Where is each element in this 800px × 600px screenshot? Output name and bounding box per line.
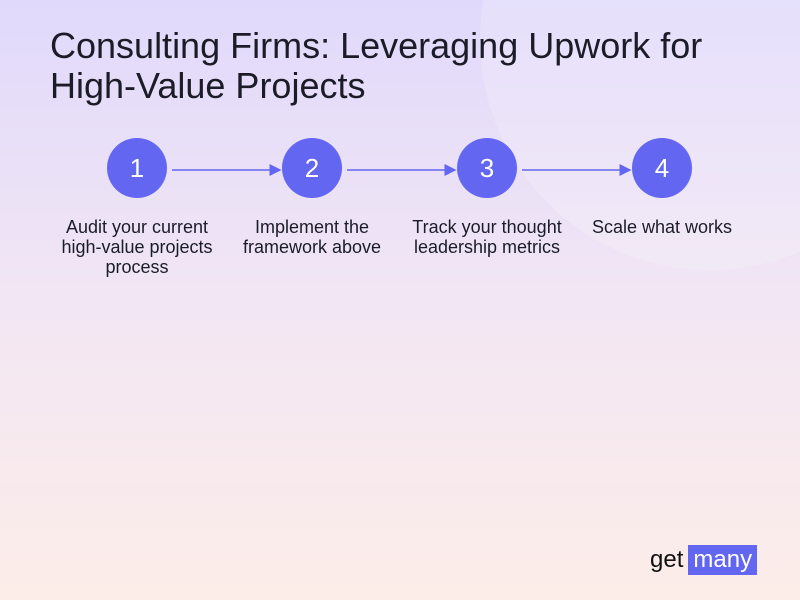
step 1 text: Audit your current high-value projects process (61, 217, 213, 277)
step 2 circle: 2 (305, 153, 319, 183)
step 3 circle (457, 138, 517, 198)
step 3 circle: 3 (480, 153, 494, 183)
step 4 text: Scale what works (592, 217, 732, 237)
step 1 circle: 1 (130, 153, 144, 183)
brand logo: many (693, 546, 752, 573)
brand logo (650, 545, 757, 575)
brand logo: get (650, 546, 683, 573)
title (50, 25, 702, 106)
step 1 circle (107, 138, 167, 198)
title: Consulting Firms: Leveraging Upwork for (50, 25, 702, 66)
arrows (172, 164, 632, 176)
step 4 circle (632, 138, 692, 198)
step 4 circle: 4 (655, 153, 669, 183)
title: High-Value Projects (50, 65, 365, 106)
step 2 text: Implement the framework above (243, 217, 381, 257)
step 2 circle (282, 138, 342, 198)
step 3 text: Track your thought leadership metrics (412, 217, 562, 257)
